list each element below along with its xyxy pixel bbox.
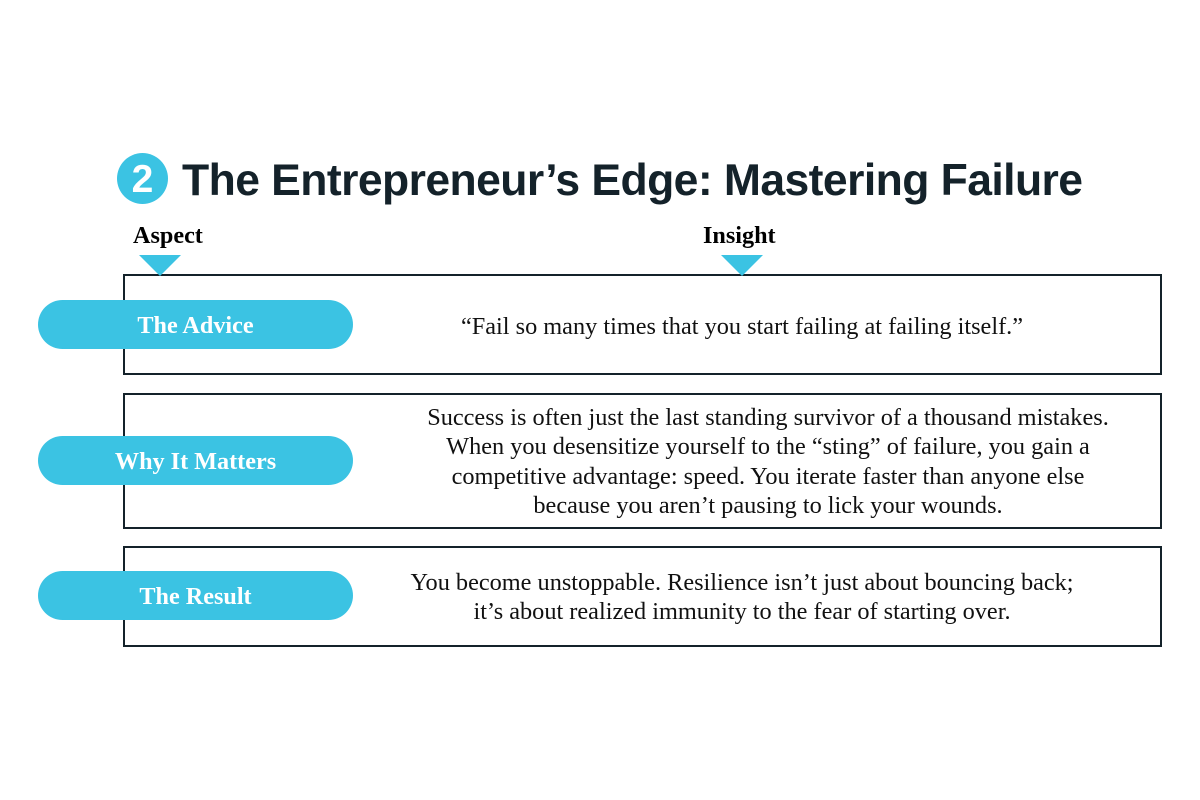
text: the result [410, 569, 1074, 625]
panel: The Advice [123, 274, 1162, 375]
panel: The Result [123, 546, 1162, 647]
text: why it matters: When you desensitize yourself to the “sting” of failure, you gain a [446, 433, 1090, 460]
column header: Aspect: Aspect [133, 222, 203, 249]
text: the result: You become unstoppable. Resilience isn’t just about bouncing back; [410, 569, 1074, 596]
label: Why It Matters [38, 436, 353, 485]
icon: number badge: 2 [132, 158, 153, 201]
text: why it matters: Success is often just the last standing survivor of a thousand mistakes. [427, 404, 1109, 431]
panel: Why It Matters [123, 393, 1162, 529]
label: The Result: The Result [139, 583, 252, 610]
text: advice quote: “Fail so many times that you start failing at failing itself.” [461, 313, 1023, 340]
text: why it matters [427, 404, 1109, 519]
label: Why It Matters: Why It Matters [115, 448, 276, 475]
text: why it matters: because you aren’t pausing to lick your wounds. [533, 492, 1003, 519]
arrow: Aspect pointer [139, 255, 181, 276]
title [117, 153, 1082, 205]
label: The Result [38, 571, 353, 620]
arrow: Insight pointer [721, 255, 763, 276]
column header: Insight: Insight [703, 222, 776, 249]
icon: number badge [117, 153, 168, 204]
label: The Advice: The Advice [137, 312, 254, 339]
label: The Advice [38, 300, 353, 349]
text: the result: it’s about realized immunity to the fear of starting over. [473, 598, 1011, 625]
heading text: The Entrepreneur’s Edge: Mastering Failure [182, 156, 1082, 205]
text: why it matters: competitive advantage: speed. You iterate faster than anyone else [452, 463, 1084, 490]
